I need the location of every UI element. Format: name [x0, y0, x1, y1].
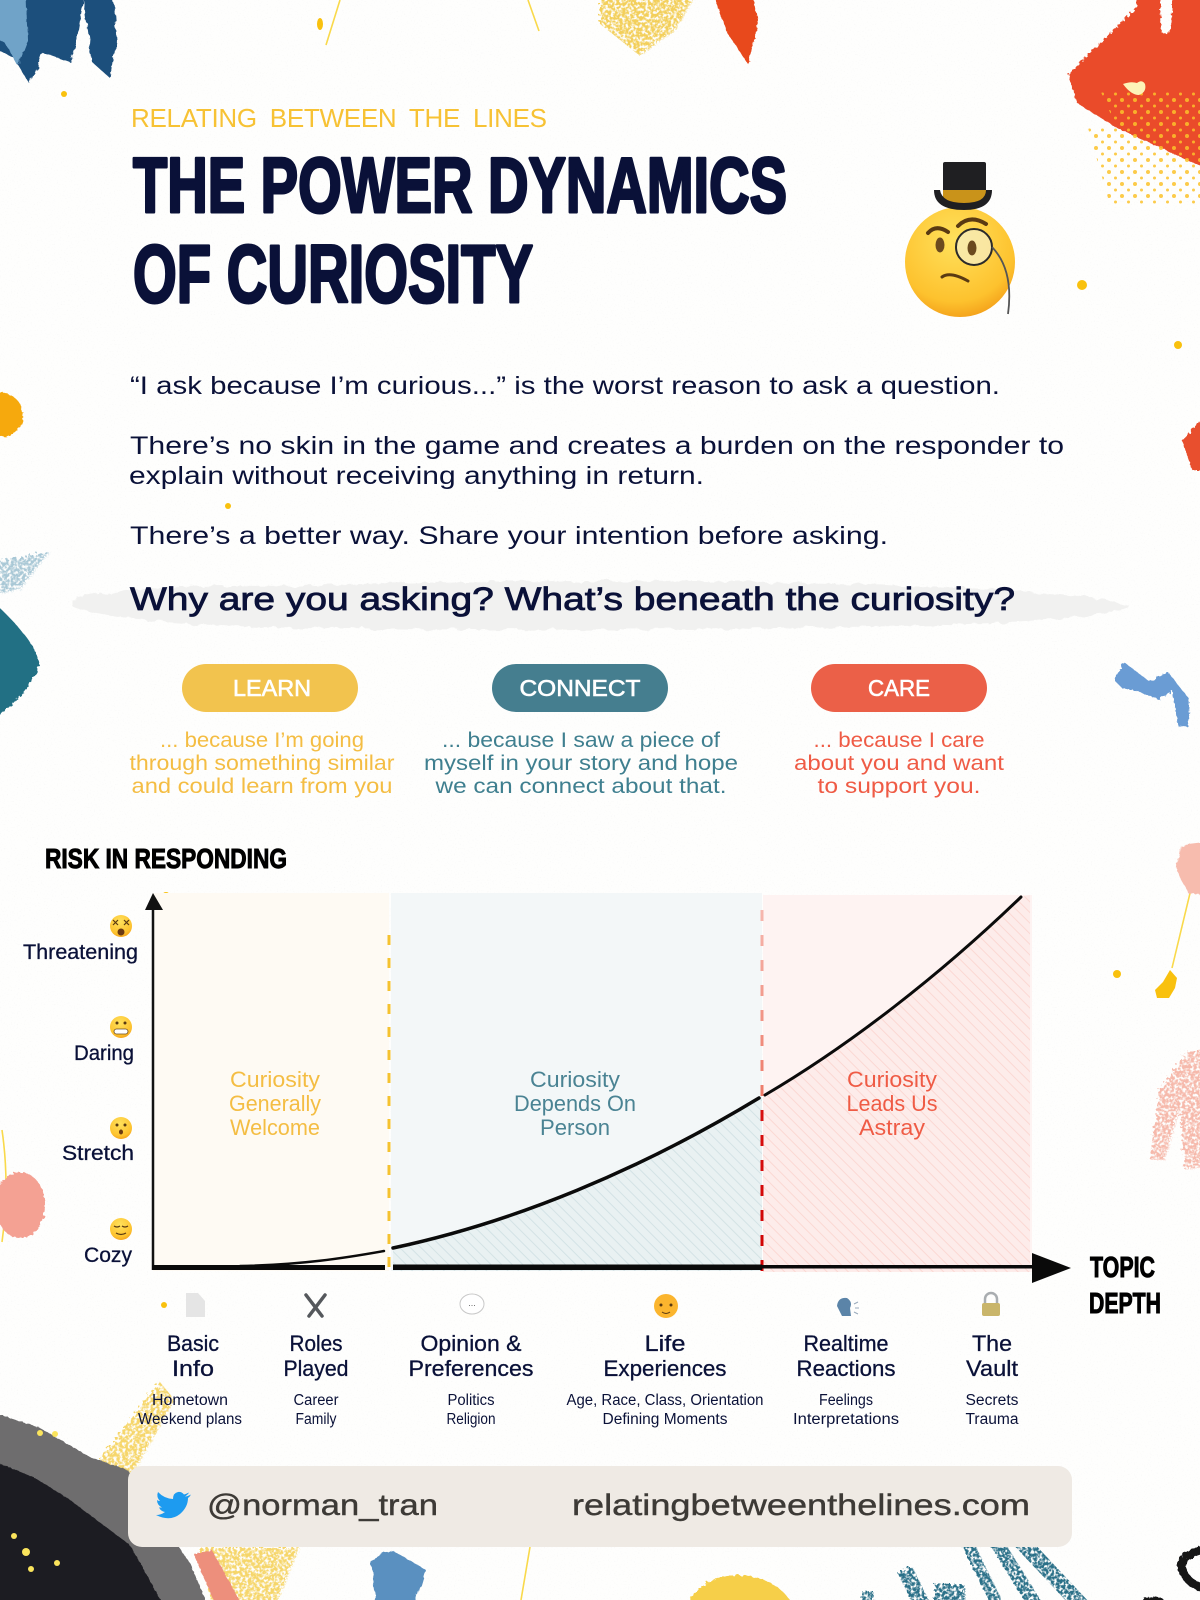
intention column: care: about you and want	[794, 752, 1004, 775]
paint: left orange blot	[0, 393, 23, 437]
paint: bottom-left yellow dots	[11, 1430, 60, 1572]
kicker: RELATING BETWEEN THE LINES	[131, 103, 547, 133]
paint: top-right red blob	[1068, 0, 1200, 175]
hatch fill: under red curve	[763, 895, 1030, 1272]
title	[133, 141, 787, 320]
paint: right pink blob	[1176, 840, 1200, 898]
y level: stretch	[62, 1117, 134, 1165]
paint: top orange shard	[708, 0, 758, 64]
risk curve	[240, 897, 1021, 1266]
topic column: realtime reactions: Feelings	[819, 1392, 873, 1409]
zone label blue: Person	[540, 1115, 610, 1140]
paint: bottom-left pale yellow streak	[100, 1382, 300, 1600]
intro text: “I ask because I’m curious...” is the worst reason to ask a question.	[130, 372, 1000, 400]
topic column: basic info: Weekend plans	[138, 1411, 242, 1428]
question heading: Why are you asking? What’s beneath the curiosity?	[130, 581, 1015, 617]
topic column: roles played: Roles	[290, 1331, 342, 1356]
paint: salmon stripe	[194, 1550, 250, 1600]
x axis title: TOPIC	[1090, 1252, 1155, 1284]
topic column: opinion and preferences: Politics	[448, 1392, 495, 1409]
heading band	[72, 581, 1130, 630]
paint: right pale pink scribble	[1150, 1050, 1200, 1170]
topic column: basic info: Info	[172, 1356, 214, 1381]
topic column: the vault: The	[972, 1331, 1012, 1356]
paint: left teal blob	[0, 590, 39, 730]
y level: cozy: Cozy	[84, 1244, 132, 1267]
paint: right red edge	[1182, 400, 1200, 470]
topic column: the vault	[966, 1293, 1019, 1428]
topic column: roles played: Career	[294, 1392, 338, 1409]
pale heart mark	[1123, 81, 1145, 95]
zone label yellow	[229, 1067, 321, 1140]
topic column: realtime reactions: Reactions	[796, 1356, 896, 1381]
intention column: learn	[130, 664, 394, 798]
y level: daring	[74, 1016, 134, 1065]
intention column: care: CARE	[868, 675, 930, 701]
intention column: care: ... because I care	[814, 729, 984, 752]
icon: monocle top-hat emoji	[905, 162, 1015, 317]
intention column: connect: myself in your story and hope	[424, 752, 738, 775]
topic column: opinion and preferences: ...	[468, 1298, 476, 1308]
paint: bottom blue blob	[370, 1550, 426, 1600]
intention column: connect: ... because I saw a piece of	[442, 729, 720, 752]
y level: cozy	[84, 1218, 132, 1267]
zone label yellow: Curiosity	[230, 1067, 320, 1092]
topic column: the vault: Secrets	[966, 1392, 1019, 1409]
paint: bottom teal brush	[868, 1540, 1095, 1600]
intro text: There’s no skin in the game and creates a burden on the responder to	[130, 432, 1064, 460]
intro text: There’s a better way. Share your intention before asking.	[130, 522, 888, 550]
y level: stretch: Stretch	[62, 1142, 134, 1165]
paint splatter dots	[61, 18, 1182, 1308]
intention column: learn: through something similar	[130, 752, 394, 775]
website: relatingbetweenthelines.com	[572, 1489, 1030, 1522]
y level: threatening: Threatening	[23, 941, 138, 964]
zone label yellow: Generally	[229, 1091, 321, 1116]
intention column: connect	[424, 664, 738, 798]
handle: @norman_tran	[207, 1489, 438, 1522]
topic column: life experiences: Experiences	[604, 1356, 726, 1381]
intro text	[129, 372, 1064, 550]
x axis title: DEPTH	[1089, 1288, 1161, 1320]
topic column: life experiences	[566, 1294, 764, 1428]
x axis title	[1089, 1252, 1161, 1320]
paint: left pink blob	[0, 1172, 45, 1238]
zone label blue: Curiosity	[530, 1067, 620, 1092]
topic column: life experiences: Life	[644, 1331, 686, 1356]
paint: bottom-right black stroke	[1138, 1546, 1200, 1600]
topic column: roles played: Family	[296, 1411, 337, 1428]
topic column: basic info: Basic	[167, 1331, 219, 1356]
topic column: life experiences: Defining Moments	[602, 1411, 728, 1428]
halftone dots	[1088, 90, 1200, 205]
footer bar	[128, 1466, 1072, 1547]
topic column: basic info	[138, 1293, 242, 1428]
paint: bottom-left grey brush	[0, 1408, 214, 1600]
zone: curiosity leads us astray	[763, 895, 1032, 1272]
intention column: connect: CONNECT	[520, 675, 640, 701]
intention column: connect: we can connect about that.	[434, 775, 726, 798]
paint: top-left blue brush	[0, 0, 116, 84]
topic column: opinion and preferences	[408, 1294, 534, 1428]
title: THE POWER DYNAMICS	[133, 141, 787, 229]
topic column: realtime reactions	[793, 1298, 899, 1428]
zone label blue: Depends On	[514, 1091, 636, 1116]
title: OF CURIOSITY	[133, 229, 533, 320]
topic column: roles played	[284, 1295, 348, 1428]
topic column: opinion and preferences: Opinion &	[420, 1331, 522, 1356]
zone label red	[846, 1067, 938, 1140]
x axis	[152, 1253, 1071, 1283]
topic column: realtime reactions: Interpretations	[793, 1411, 899, 1428]
paint: pale blue specks	[0, 552, 50, 598]
zone label red: Leads Us	[846, 1091, 938, 1116]
topic column: roles played: Played	[284, 1356, 348, 1381]
intention column: care	[794, 664, 1004, 798]
topic column: realtime reactions: Realtime	[804, 1331, 888, 1356]
topic column: opinion and preferences: Preferences	[408, 1356, 534, 1381]
intention column: learn: LEARN	[233, 675, 311, 701]
zone: curiosity depends on person	[391, 893, 762, 1271]
paint: bottom yellow dome	[680, 1575, 800, 1600]
hatch fill: under blue curve	[393, 1096, 762, 1271]
paint: top yellow scribble	[600, 0, 704, 56]
topic column: basic info: Hometown	[152, 1392, 228, 1409]
zone: curiosity generally welcome	[153, 893, 389, 1271]
y axis title: RISK IN RESPONDING	[45, 843, 287, 874]
paint: right blue squiggle	[1114, 662, 1190, 727]
topic column: life experiences: Age, Race, Class, Orientation	[566, 1392, 764, 1409]
zone label red: Curiosity	[847, 1067, 937, 1092]
zone divider: yellow	[388, 935, 390, 1270]
zone label blue	[514, 1067, 636, 1140]
zone label yellow: Welcome	[230, 1115, 320, 1140]
topic column: the vault: Trauma	[966, 1411, 1019, 1428]
zone label red: Astray	[859, 1115, 925, 1140]
chart: risk curve	[145, 893, 1071, 1283]
topic column: the vault: Vault	[966, 1356, 1018, 1381]
intention column: learn: ... because I’m going	[160, 729, 364, 752]
zone divider: red	[760, 910, 764, 1282]
paint: bottom-left black brush	[0, 1455, 172, 1600]
icon: twitter bird	[156, 1492, 191, 1518]
y level: threatening	[23, 915, 138, 964]
intro text: explain without receiving anything in return.	[129, 462, 704, 490]
y level: daring: Daring	[74, 1042, 134, 1065]
y axis	[145, 893, 163, 1270]
intention column: care: to support you.	[818, 775, 980, 798]
topic column: opinion and preferences: Religion	[446, 1411, 496, 1428]
intention column: learn: and could learn from you	[132, 775, 392, 798]
